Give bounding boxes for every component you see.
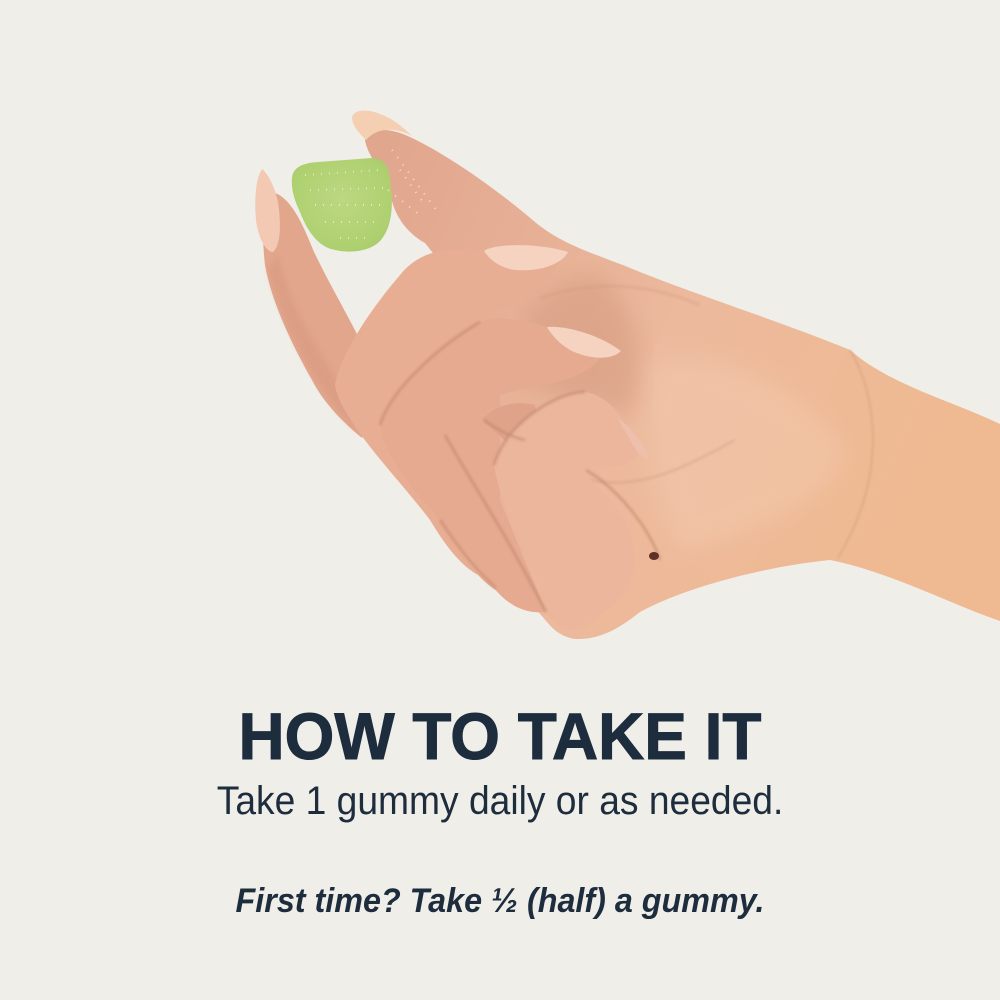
icon: gummy (292, 158, 392, 252)
icon: fingernail on index finger (352, 110, 412, 140)
icon: index finger and palm (365, 130, 1000, 639)
icon: thumb (263, 192, 370, 438)
heading: HOW TO TAKE IT (239, 699, 761, 773)
icon: mole (649, 552, 659, 560)
icon: sugar crystals on finger (388, 150, 440, 215)
icon: little fingernail (617, 418, 649, 458)
subheading: Take 1 gummy daily or as needed. (217, 779, 783, 823)
icon: ring fingernail (547, 327, 621, 358)
icon: bent fingers (335, 249, 660, 630)
illustration: hand holding green gummy (255, 110, 1000, 639)
note: First time? Take ½ (half) a gummy. (236, 882, 764, 920)
icon: middle fingernail (484, 245, 568, 270)
icon: thumb nail (255, 169, 280, 252)
